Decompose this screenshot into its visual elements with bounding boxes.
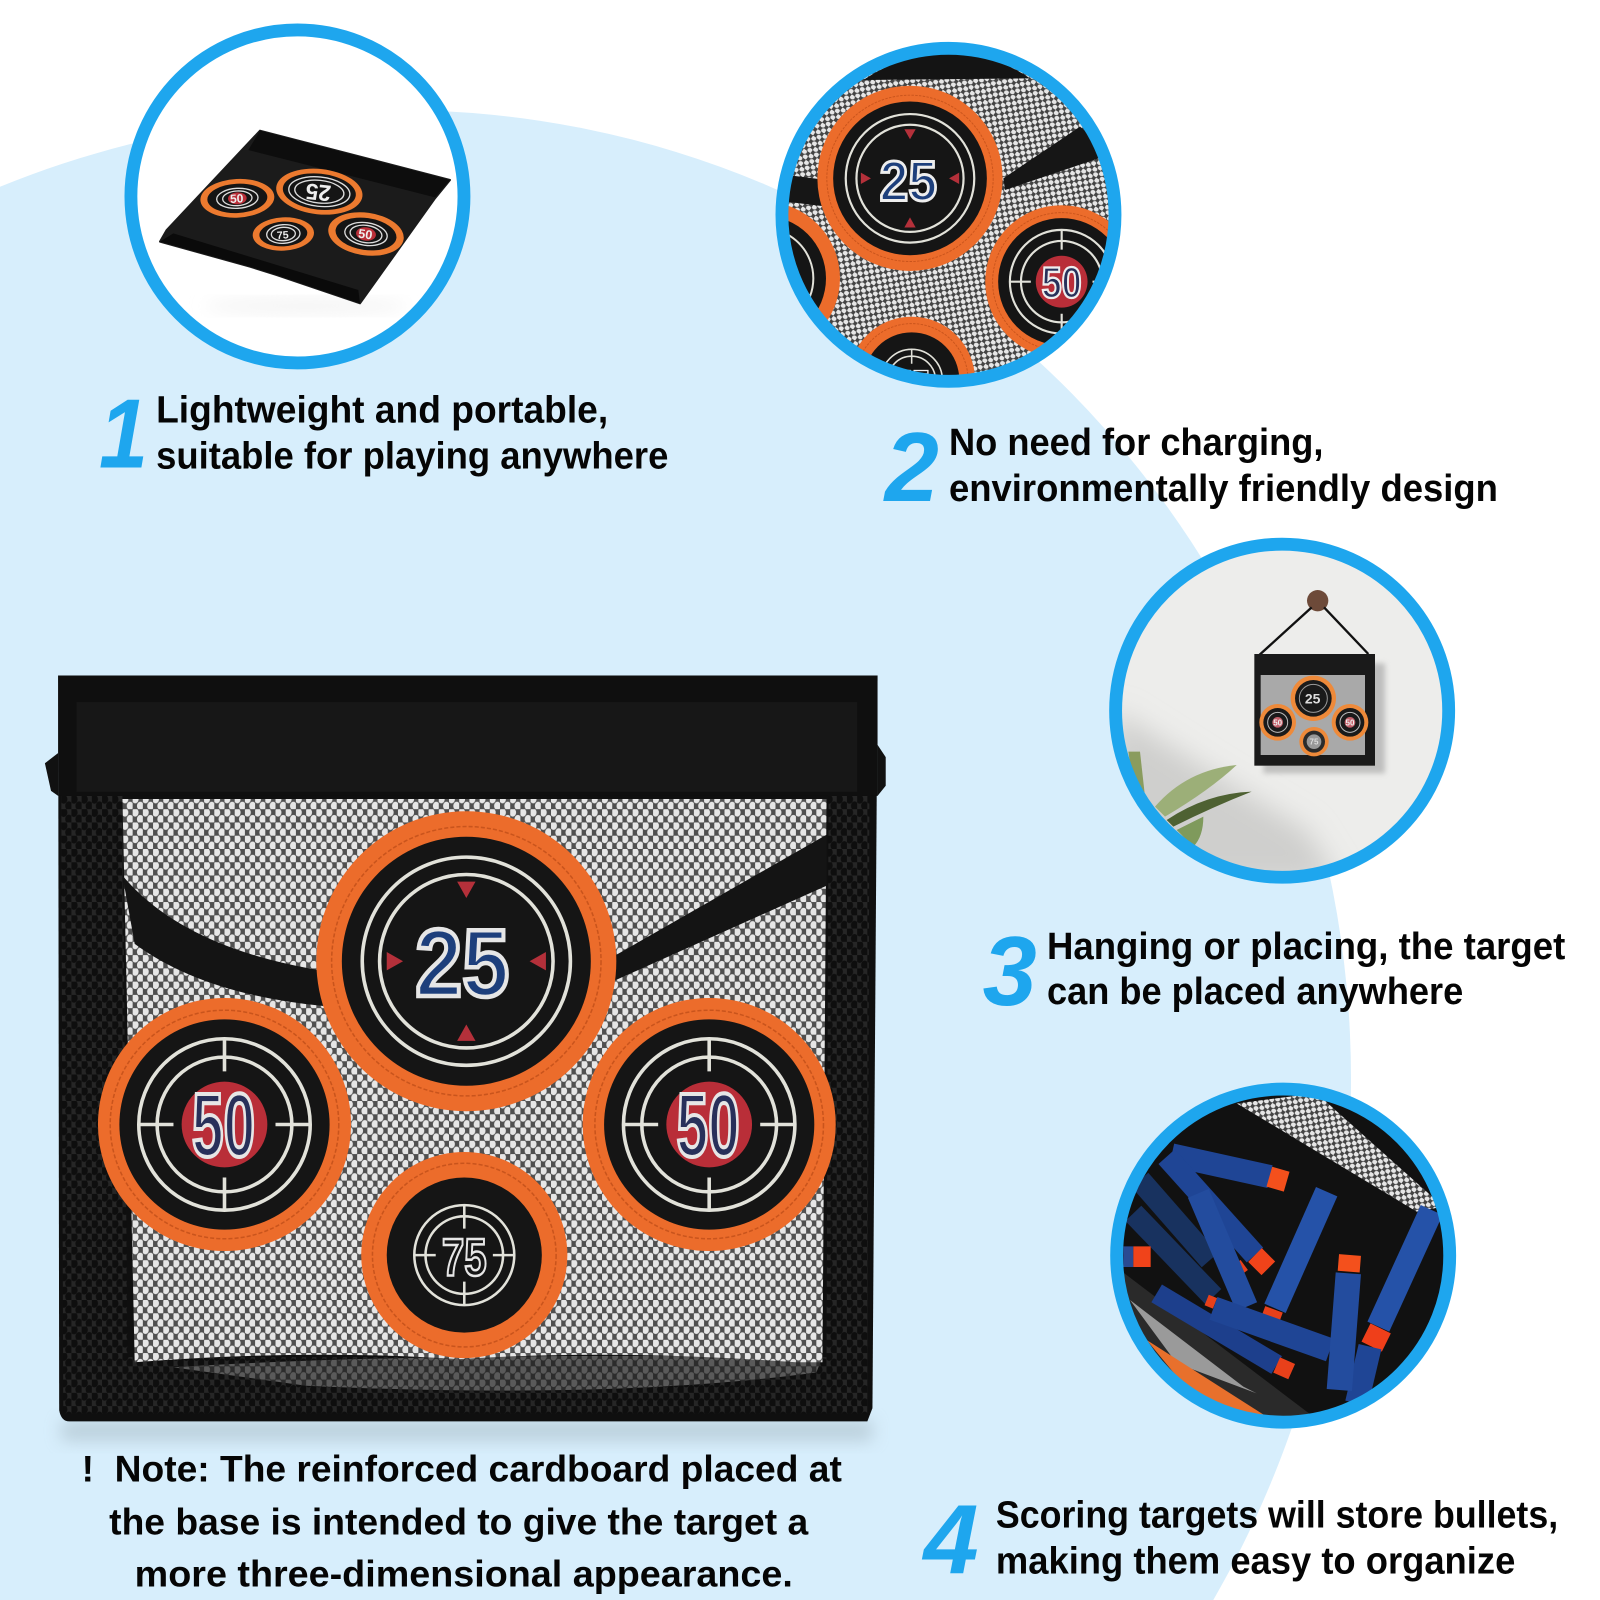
side handles [45, 745, 886, 796]
number 3: 3 [983, 916, 1037, 1026]
bag body [58, 676, 878, 1421]
top fabric band [58, 676, 878, 796]
note: ! Note: The reinforced cardboard placed at [82, 1449, 842, 1490]
target 50 right: 50 [677, 1076, 740, 1176]
wall photo: 50 [1273, 718, 1283, 727]
text 2: environmentally friendly design [949, 467, 1498, 509]
wall photo: 25 [1305, 690, 1321, 706]
photo circle 2: target close-up [776, 42, 1122, 388]
close-up mesh photo: 25 [880, 151, 937, 214]
photo circle 3: hanging on wall [1112, 541, 1459, 888]
folded bag photo [137, 110, 458, 356]
folded bag photo: 75 [277, 229, 289, 242]
feature 2 [883, 412, 1498, 522]
ring [1116, 544, 1449, 877]
ring [131, 30, 464, 363]
folded bag photo: 25 [304, 178, 332, 207]
folded bag photo: 50 [357, 227, 373, 242]
number 2: 2 [883, 412, 939, 522]
target 50 left: 50 [192, 1076, 255, 1176]
photo circle 1: folded target [122, 20, 474, 372]
target 75: 75 [442, 1229, 487, 1288]
target 50 left [98, 998, 351, 1251]
note: the base is intended to give the target a [109, 1502, 809, 1543]
soft shadow under bag [61, 1420, 872, 1441]
feature 1 [99, 378, 668, 488]
side and bottom mesh panels [61, 796, 869, 1413]
lighter bottom mesh strip [173, 1356, 822, 1391]
ring [1117, 1089, 1450, 1422]
target 50 right [583, 998, 836, 1251]
target 25: 25 [415, 910, 509, 1017]
text 2: No need for charging, [949, 421, 1323, 463]
feature 4 [921, 1484, 1558, 1594]
close-up mesh photo: 50 [1042, 260, 1082, 308]
background blue shape [0, 110, 1351, 1600]
black straps [122, 835, 827, 1006]
number 1: 1 [99, 378, 148, 488]
target 75 [361, 1152, 567, 1358]
target 25 [316, 811, 616, 1111]
folded bag photo: 50 [230, 191, 244, 206]
wall photo: 50 [1346, 718, 1355, 727]
text 4: Scoring targets will store bullets, [996, 1494, 1558, 1536]
photo circle 4: stored darts [1112, 1082, 1459, 1430]
wall photo [1122, 550, 1442, 871]
text 1: suitable for playing anywhere [156, 434, 668, 476]
feature 3 [983, 916, 1566, 1026]
text 4: making them easy to organize [996, 1539, 1515, 1581]
ring [782, 48, 1115, 381]
darts photo [1123, 1096, 1444, 1416]
number 4: 4 [921, 1484, 979, 1594]
product photo: scoring target bag [45, 676, 886, 1441]
text 3: can be placed anywhere [1047, 970, 1463, 1012]
wall photo: 75 [1310, 738, 1319, 747]
close-up mesh photo [788, 54, 1109, 375]
note: more three-dimensional appearance. [135, 1554, 793, 1595]
text 3: Hanging or placing, the target [1047, 925, 1566, 967]
text 1: Lightweight and portable, [156, 388, 608, 430]
close-up mesh photo: 75 [893, 364, 930, 401]
central light mesh window [122, 799, 827, 1362]
